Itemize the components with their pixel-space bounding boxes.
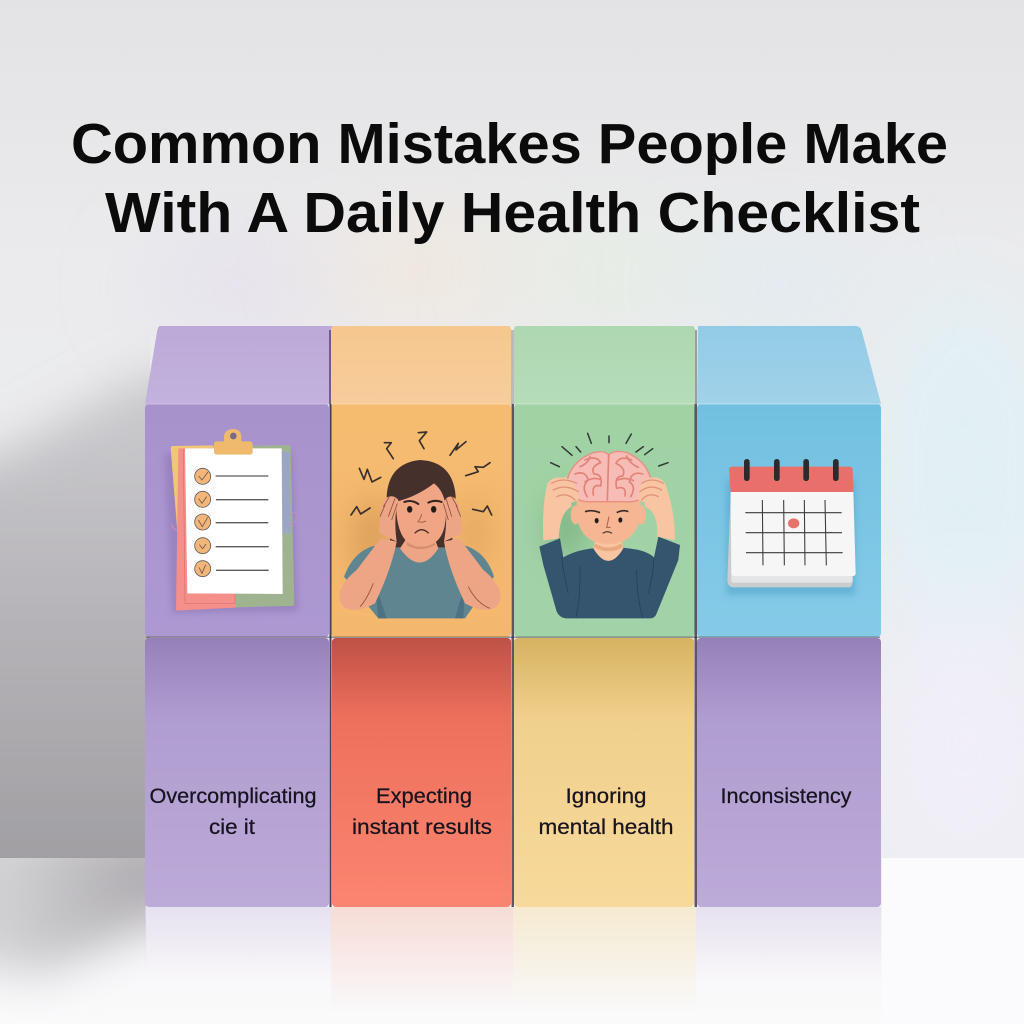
panel: lower block ignoring mental health [514,638,694,907]
label: overcomplicating [150,785,316,839]
icon: stressed woman [339,432,501,618]
panel: overcomplicating upper block [145,326,333,637]
label: ignoring mental health: Ignoring [566,785,646,808]
label: inconsistency: Inconsistency [720,785,852,808]
label: ignoring mental health: mental health [538,816,674,839]
label: expecting instant results: Expecting [376,785,472,808]
label: overcomplicating: Overcomplicating [150,785,316,808]
title: Common Mistakes People Make [71,112,948,176]
icon: overloaded person with brain [539,433,680,618]
label: expecting instant results: instant results [352,816,492,839]
icon: calendar [727,459,856,595]
panel: lower block expecting instant results [332,638,511,907]
title [71,112,948,245]
panel: lower block inconsistency [697,638,881,907]
title: With A Daily Health Checklist [105,181,920,245]
panel: inconsistency upper block [697,326,881,637]
icon: clipboard checklist [165,429,298,613]
panel: expecting instant results upper block [331,326,511,637]
label: expecting instant results [352,785,492,839]
panel: lower block overcomplicating [145,638,329,907]
label: ignoring mental health [538,785,674,839]
label: overcomplicating: cie it [209,816,255,839]
panel: ignoring mental health upper block [514,326,695,637]
block seams [146,330,880,907]
